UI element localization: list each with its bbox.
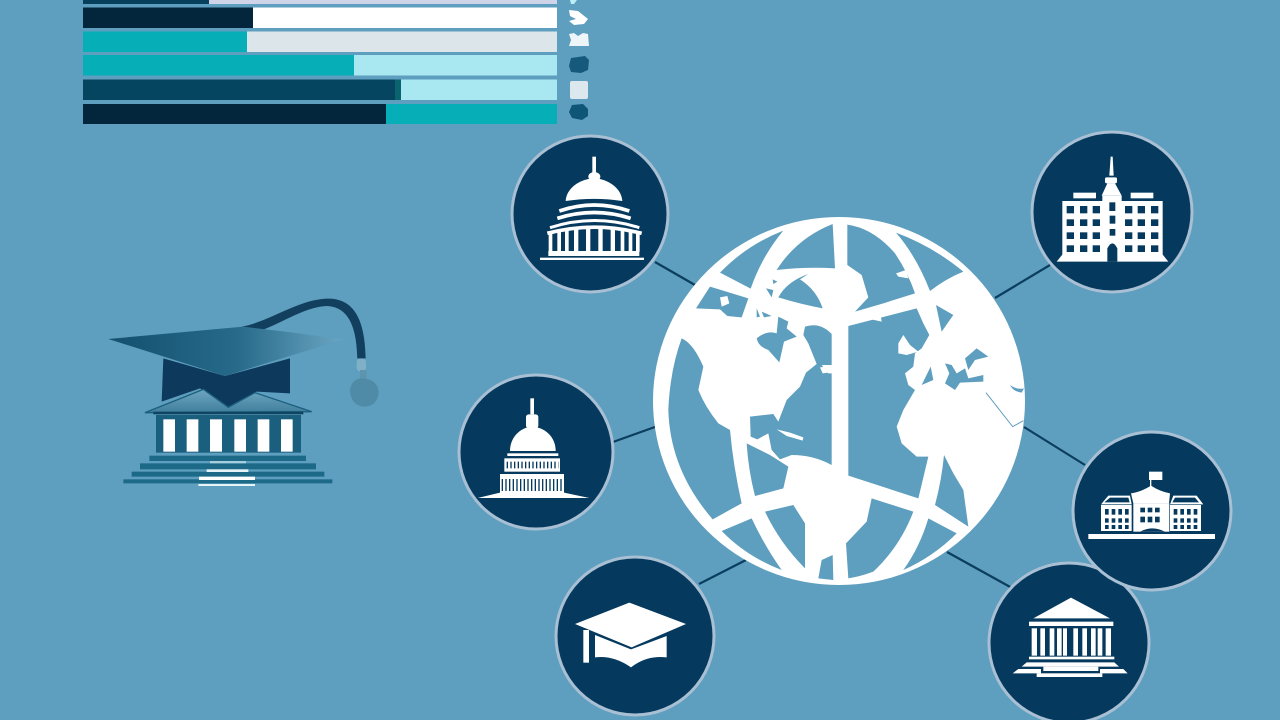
cap base bbox=[162, 358, 290, 407]
node: campus hall with flag bbox=[1073, 432, 1231, 590]
bar row 3 bbox=[83, 32, 557, 52]
cap tassel bbox=[350, 359, 379, 407]
bar row 2 bbox=[83, 8, 557, 28]
globe bbox=[653, 217, 1025, 585]
building roof bbox=[145, 389, 312, 413]
node: campus hall on lawn, lower overlap bbox=[989, 563, 1149, 720]
bar row 5 bbox=[83, 80, 557, 100]
node circle bbox=[1073, 432, 1231, 590]
ocean cells bbox=[668, 224, 1024, 580]
icon: campus hall bbox=[1088, 472, 1215, 539]
icon: capitol bbox=[478, 398, 589, 498]
cap board bbox=[108, 327, 343, 376]
cap tassel cord bbox=[242, 299, 366, 358]
bar row 1 bbox=[83, 0, 557, 4]
connector lines bbox=[613, 262, 1085, 588]
node circle bbox=[459, 375, 613, 529]
building steps bbox=[123, 456, 332, 486]
node: institution with dome and columns bbox=[512, 136, 668, 292]
node circle bbox=[512, 136, 668, 292]
icon: classical temple bbox=[1013, 598, 1128, 677]
land details bbox=[720, 270, 918, 441]
rift line bbox=[986, 393, 1023, 427]
icon: mortarboard bbox=[575, 603, 686, 667]
globe disc bbox=[653, 217, 1025, 585]
node: university tower block bbox=[1032, 132, 1192, 292]
stacked bar chart bbox=[83, 0, 557, 124]
bar row 6 bbox=[83, 104, 557, 124]
node circle lower right bbox=[989, 563, 1149, 720]
building columns bbox=[153, 412, 303, 453]
node: capitol building bbox=[459, 375, 613, 529]
legend markers bbox=[569, 0, 589, 120]
icon: tower building bbox=[1057, 157, 1168, 262]
node: graduation cap bbox=[556, 557, 714, 715]
icon: capitol rotunda bbox=[540, 157, 644, 260]
node circle bbox=[556, 557, 714, 715]
bar row 4 bbox=[83, 55, 557, 76]
icon: graduation cap on building bbox=[108, 299, 379, 486]
node circle bbox=[1032, 132, 1192, 292]
